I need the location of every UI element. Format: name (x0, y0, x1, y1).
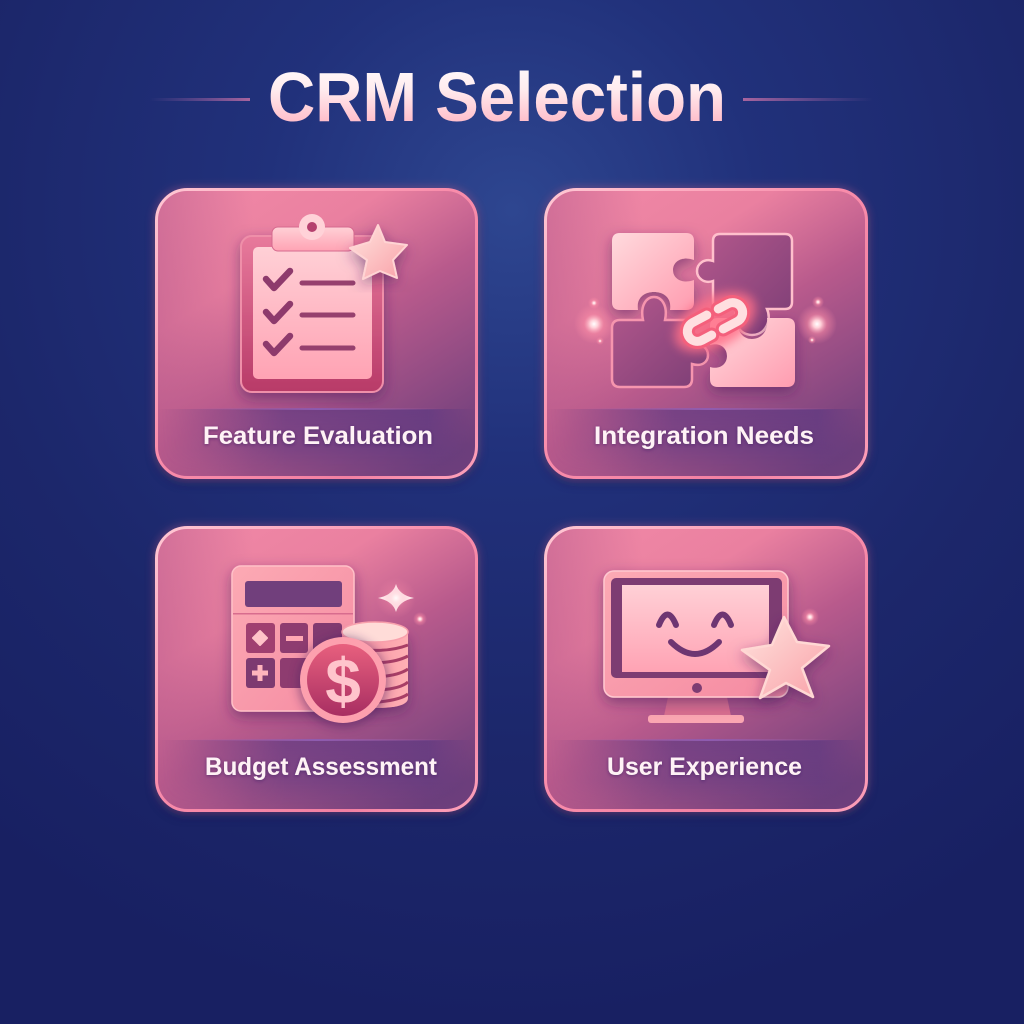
label: Budget Assessment: Budget Assessment (205, 753, 438, 781)
label: Feature Evaluation: Feature Evaluation (203, 422, 433, 450)
icon: calculator and coins: $ (325, 645, 361, 717)
panel: Integration Needs (544, 188, 868, 483)
icon: calculator and coins (232, 566, 427, 727)
label: Integration Needs: Integration Needs (594, 422, 814, 450)
title (150, 58, 873, 136)
icon: monitor with smile and star (604, 571, 829, 723)
title: CRM Selection (268, 58, 726, 136)
panel: Feature Evaluation (155, 188, 478, 483)
panel: User Experience (544, 526, 868, 816)
label: User Experience: User Experience (607, 753, 802, 781)
icon: puzzle pieces with link (574, 233, 837, 387)
icon: clipboard with star (241, 214, 407, 392)
panel: Budget Assessment (155, 526, 478, 816)
